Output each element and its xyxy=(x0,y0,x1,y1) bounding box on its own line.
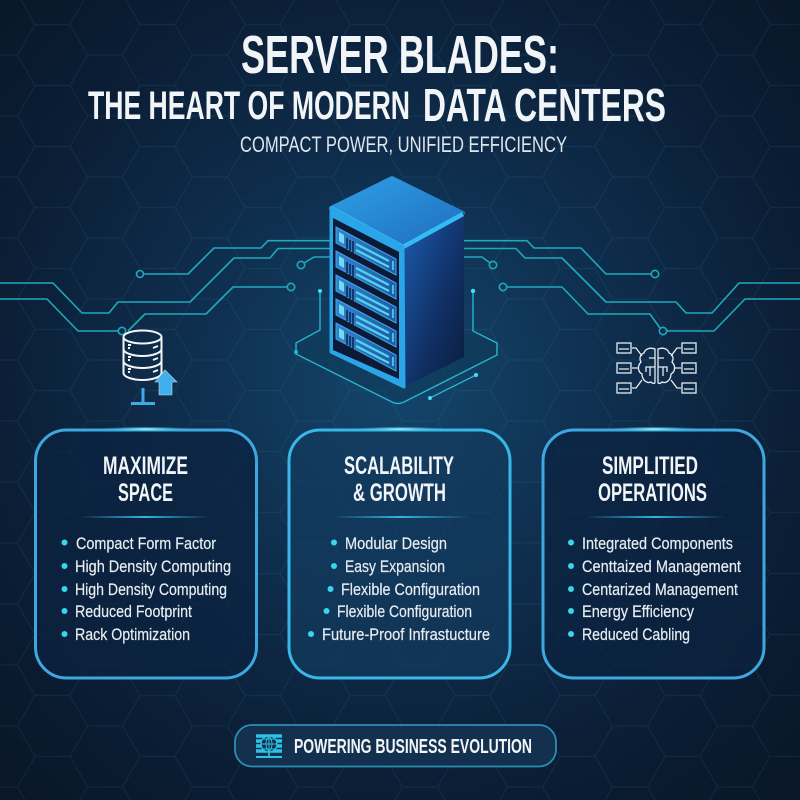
panel: scalability and growth xyxy=(289,426,510,678)
bullet list: Centarized Management xyxy=(582,580,738,599)
platform xyxy=(294,289,497,404)
rack right face xyxy=(403,213,464,387)
bullet list: Modular Design xyxy=(345,534,447,553)
footer banner xyxy=(235,725,556,766)
blade modules xyxy=(336,227,396,371)
panel: maximize space xyxy=(36,426,256,678)
title xyxy=(88,25,666,131)
bullet list xyxy=(568,534,741,644)
rack top face xyxy=(331,178,463,246)
heading: SPACE xyxy=(118,479,173,507)
footer banner: POWERING BUSINESS EVOLUTION xyxy=(294,736,532,758)
heading xyxy=(598,452,707,507)
heading: & GROWTH xyxy=(353,479,446,507)
rack front face xyxy=(331,208,404,387)
bullet list: Reduced Cabling xyxy=(582,625,690,644)
bullet list: High Density Computing xyxy=(75,580,227,599)
circuit lines: right xyxy=(464,241,800,335)
bullet list xyxy=(62,534,231,644)
bullet list: Energy Efficiency xyxy=(582,602,694,621)
heading: SIMPLITIED xyxy=(602,452,698,480)
heading: MAXIMIZE xyxy=(103,452,188,480)
bullet list xyxy=(308,534,490,644)
icon: globe on server xyxy=(256,736,282,757)
title: SERVER BLADES: xyxy=(241,25,559,85)
icon: brain network xyxy=(617,343,696,393)
bullet list: Flexible Configuration xyxy=(337,602,472,621)
bullet list: High Density Computing xyxy=(75,557,231,576)
heading: OPERATIONS xyxy=(598,479,707,507)
circuit lines: left xyxy=(0,241,330,335)
bullet list: Integrated Components xyxy=(582,534,733,553)
icon: database with upload arrow xyxy=(124,330,177,404)
panel: simplified operations xyxy=(543,426,764,678)
title: DATA CENTERS xyxy=(423,79,666,131)
server rack xyxy=(331,178,464,387)
heading xyxy=(344,452,454,507)
heading: SCALABILITY xyxy=(344,452,454,480)
bullet list: Compact Form Factor xyxy=(76,534,216,553)
bullet list: Flexible Configuration xyxy=(341,580,480,599)
subtitle: COMPACT POWER, UNIFIED EFFICIENCY xyxy=(240,132,567,157)
bullet list: Rack Optimization xyxy=(75,625,190,644)
title: THE HEART OF MODERN xyxy=(88,84,410,128)
bullet list: Reduced Footprint xyxy=(75,602,192,621)
bullet list: Centtaized Management xyxy=(582,557,741,576)
bullet list: Easy Expansion xyxy=(345,557,445,576)
bullet list: Future-Proof Infrastucture xyxy=(322,625,490,644)
heading xyxy=(103,452,188,507)
